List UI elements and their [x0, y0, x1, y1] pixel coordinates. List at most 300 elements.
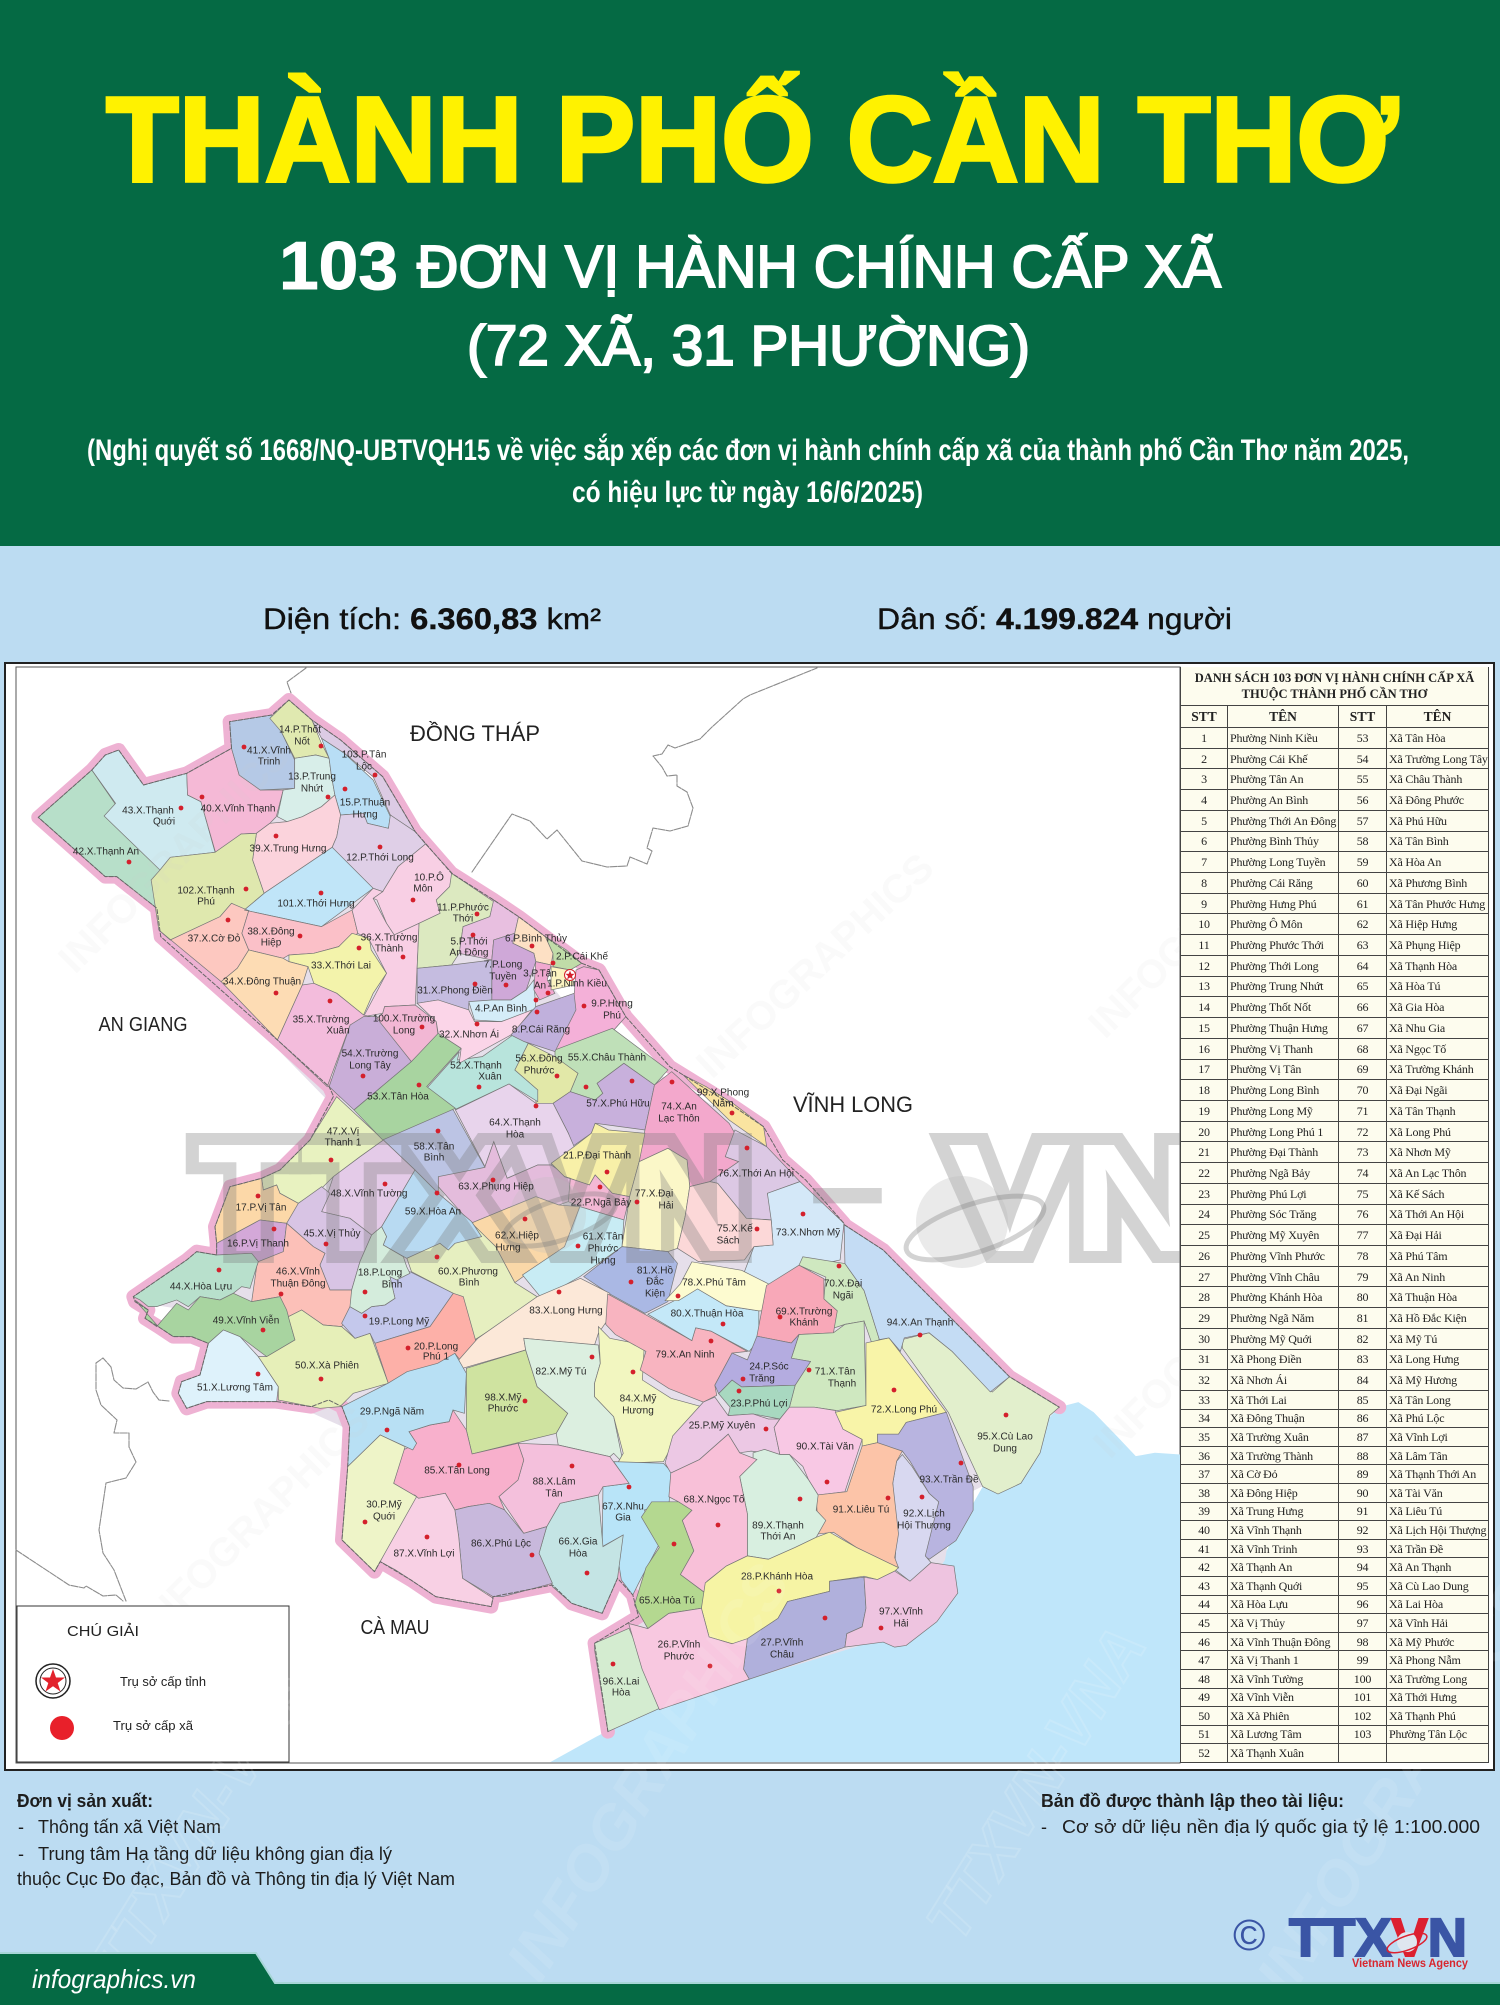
label 71 — [807, 1366, 856, 1390]
table: list of 103 communes: Phường Tân Lộc — [1389, 1727, 1467, 1741]
label 5: 5.P.Thới — [451, 936, 487, 948]
credits: production unit — [17, 1791, 455, 1889]
area 44 — [133, 1252, 258, 1307]
table: list of 103 communes: Xã Đại Hải — [1389, 1228, 1442, 1242]
label 74 — [658, 1080, 700, 1124]
table: list of 103 communes: 6 — [1201, 834, 1207, 848]
label 61 — [576, 1232, 623, 1266]
table: list of 103 communes: Xã Vĩnh Viễn — [1230, 1690, 1294, 1704]
area 103 — [312, 720, 415, 832]
label 43 — [122, 806, 183, 828]
table: list of 103 communes: Xã Mỹ Hương — [1389, 1373, 1457, 1387]
area 37 — [159, 903, 249, 982]
label 88: Tân — [545, 1488, 563, 1500]
diagonal infographics watermarks on map — [50, 733, 1333, 1646]
area 81 — [584, 1247, 677, 1313]
area 7 — [492, 933, 536, 1000]
label 16: 16.P.Vị Thanh — [227, 1238, 289, 1250]
table: list of 103 communes: 59 — [1357, 855, 1368, 869]
label 103 — [342, 750, 386, 777]
area 28 — [701, 1532, 899, 1644]
label 5 — [450, 933, 488, 958]
communes: north group — [38, 700, 582, 1140]
label 23: 23.P.Phú Lợi — [731, 1398, 787, 1410]
table: list of 103 communes: Xã Thới An Hội — [1389, 1207, 1464, 1221]
communes: west group — [133, 1097, 485, 1408]
table: list of 103 communes: 16 — [1198, 1042, 1210, 1056]
table: list of 103 communes: Xã Phong Nẫm — [1389, 1653, 1461, 1667]
label 24: 24.P.Sóc — [749, 1362, 789, 1372]
area 70 — [799, 1257, 879, 1343]
area 101 — [244, 847, 373, 927]
table: list of 103 communes: 69 — [1357, 1062, 1368, 1076]
table: list of 103 communes: 10 — [1198, 917, 1210, 931]
table: list of 103 communes: Phường An Bình — [1230, 793, 1308, 807]
label 74: Lạc Thôn — [658, 1114, 700, 1124]
table: list of 103 communes: 43 — [1198, 1579, 1210, 1593]
resolution note — [87, 433, 1409, 509]
area 36 — [352, 888, 419, 1017]
label 100: 100.X.Trường — [373, 1014, 435, 1024]
label 96 — [603, 1662, 639, 1698]
label 10 — [411, 870, 444, 902]
table: list of 103 communes: Xã Vĩnh Trinh — [1230, 1542, 1297, 1556]
credits: production unit: thuộc Cục Đo đạc, Bản đồ và Thông tin địa lý Việt Nam — [17, 1869, 455, 1889]
label 54: 54.X.Trường — [342, 1048, 398, 1060]
map area — [0, 667, 1500, 1763]
table: list of 103 communes: STT — [1191, 708, 1217, 724]
label 72: 72.X.Long Phú — [871, 1404, 937, 1416]
table: list of 103 communes: 3 — [1201, 772, 1207, 786]
table: list of 103 communes: THUỘC THÀNH PHỐ CẦN THƠ — [1242, 687, 1427, 701]
area 1 — [551, 967, 574, 990]
label 6 — [505, 932, 567, 948]
table: list of 103 communes: 12 — [1198, 959, 1210, 973]
area 85 — [394, 1410, 524, 1510]
table: list of 103 communes: Phường Ngã Năm — [1230, 1311, 1314, 1325]
label 51: 51.X.Lương Tâm — [197, 1382, 273, 1394]
map legend: CHÚ GIẢI — [67, 1623, 139, 1640]
area 2 — [545, 937, 582, 970]
table: list of 103 communes: Xã Trần Đề — [1389, 1542, 1443, 1556]
table: list of 103 communes: 98 — [1357, 1635, 1368, 1649]
area 55 — [555, 1028, 668, 1100]
table: list of 103 communes: 83 — [1357, 1352, 1368, 1366]
label 22: 22.P.Ngã Bảy — [571, 1198, 631, 1208]
table: list of 103 communes: 29 — [1198, 1311, 1210, 1325]
label 38: 38.X.Đông — [247, 926, 295, 938]
area 86 — [455, 1503, 552, 1597]
label 47: Thanh 1 — [325, 1138, 362, 1148]
area 91 — [816, 1443, 902, 1568]
watermark: TTXVN VNA: – — [809, 1098, 886, 1270]
table: list of 103 communes: 47 — [1198, 1653, 1210, 1667]
area 80 — [648, 1289, 759, 1351]
area 45 — [287, 1187, 372, 1290]
table: list of 103 communes: 52 — [1198, 1746, 1210, 1760]
table: list of 103 communes: 91 — [1357, 1504, 1368, 1518]
label 70: 70.X.Đại — [824, 1278, 862, 1290]
label 25: 25.P.Mỹ Xuyên — [689, 1420, 755, 1432]
border dashes — [38, 700, 1059, 1732]
label 46: 46.X.Vĩnh — [276, 1266, 320, 1278]
table: list of 103 communes: Xã Thuận Hòa — [1389, 1290, 1457, 1304]
table: list of 103 communes: Xã Mỹ Phước — [1389, 1635, 1454, 1649]
label 86: 86.X.Phú Lộc — [471, 1538, 531, 1550]
label 84: 84.X.Mỹ — [620, 1394, 656, 1404]
table: list of 103 communes: 99 — [1357, 1653, 1368, 1667]
table: list of 103 communes: Phường Mỹ Xuyên — [1230, 1228, 1319, 1242]
table: list of 103 communes: Xã Cờ Đỏ — [1230, 1467, 1277, 1481]
table: list of 103 communes: 39 — [1198, 1504, 1210, 1518]
table: list of 103 communes: 19 — [1198, 1104, 1210, 1118]
area 46 — [252, 1223, 352, 1327]
table: list of 103 communes: 67 — [1357, 1021, 1368, 1035]
label 67: 67.X.Nhu — [602, 1502, 644, 1512]
label 14: 14.P.Thốt — [279, 724, 321, 736]
table: list of 103 communes: Xã Vị Thủy — [1230, 1616, 1285, 1630]
area 100 — [377, 1005, 438, 1062]
table: list of 103 communes: 90 — [1357, 1486, 1368, 1500]
table: list of 103 communes: 28 — [1198, 1290, 1210, 1304]
table: list of 103 communes: 75 — [1357, 1187, 1368, 1201]
label 3: An — [534, 980, 546, 992]
table: list of 103 communes: 14 — [1198, 1000, 1210, 1014]
area 10 — [373, 844, 452, 935]
label 9 — [582, 998, 633, 1022]
area 93 — [877, 1412, 973, 1559]
table: list of 103 communes: 70 — [1357, 1083, 1368, 1097]
table: list of 103 communes: 54 — [1357, 752, 1368, 766]
label 62 — [495, 1217, 539, 1254]
table: list of 103 communes: 42 — [1198, 1560, 1210, 1574]
table: list of 103 communes: TÊN — [1269, 708, 1297, 724]
table: list of 103 communes: Phường Cái Răng — [1230, 876, 1313, 890]
table: list of 103 communes: Xã Trường Long Tây — [1389, 752, 1488, 766]
resolution note: có hiệu lực từ ngày 16/6/2025) — [572, 476, 923, 509]
label 33 — [311, 946, 371, 972]
diagonal infographics watermarks on map: INFOGRAPHICS — [130, 1398, 378, 1646]
table: list of 103 communes: Phường Phước Thới — [1230, 938, 1324, 952]
label 46: Thuận Đông — [270, 1278, 326, 1290]
table: list of 103 communes: 88 — [1357, 1449, 1368, 1463]
label 97: Hải — [893, 1618, 909, 1630]
label 41: Trinh — [258, 756, 280, 768]
table: list of 103 communes: 40 — [1198, 1523, 1210, 1537]
area 99 — [683, 1075, 767, 1147]
area 24 — [715, 1334, 810, 1394]
label 42 — [73, 846, 139, 864]
legend: provincial seat: Trụ sở cấp tỉnh — [120, 1674, 206, 1689]
table: list of 103 communes: Xã Hòa Lựu — [1230, 1597, 1288, 1611]
label 21 — [563, 1150, 631, 1174]
label 45 — [303, 1228, 361, 1246]
area 64 — [455, 1084, 574, 1178]
label 89 — [752, 1497, 804, 1542]
label 11: Thới — [453, 914, 473, 924]
area 56 — [515, 1043, 578, 1113]
area 43 — [92, 750, 215, 870]
label 72 — [871, 1388, 937, 1416]
label 89: Thới An — [761, 1532, 795, 1542]
table: list of 103 communes: 4 — [1201, 793, 1207, 807]
table: list of 103 communes: Xã Long Hưng — [1389, 1352, 1459, 1366]
table: list of 103 communes: 56 — [1357, 793, 1368, 807]
label 78 — [676, 1278, 746, 1298]
table: list of 103 communes: 100 — [1354, 1672, 1371, 1686]
label 36: 36.X.Trường — [361, 932, 417, 944]
title: THÀNH PHỐ CẦN THƠ — [106, 71, 1399, 207]
table: list of 103 communes: 92 — [1357, 1523, 1368, 1537]
area 9 — [555, 967, 626, 1050]
area 75 — [677, 1182, 773, 1262]
area 72 — [835, 1338, 946, 1446]
label 49 — [213, 1314, 279, 1332]
table: list of 103 communes: Xã Trường Khánh — [1389, 1062, 1474, 1076]
label 74: 74.X.An — [661, 1102, 697, 1112]
watermark globes — [499, 1176, 1051, 1273]
table: list of 103 communes: 31 — [1198, 1352, 1210, 1366]
label 102: 102.X.Thạnh — [177, 886, 235, 896]
table: list of 103 communes: Xã Tài Văn — [1389, 1486, 1443, 1500]
label 101: 101.X.Thới Hưng — [277, 898, 355, 910]
label 68: 68.X.Ngọc Tố — [684, 1494, 745, 1506]
label 36: Thành — [375, 944, 403, 954]
label 61: Phước — [588, 1244, 618, 1254]
label 48: 48.X.Vĩnh Tường — [330, 1188, 408, 1200]
label 9: Phú — [603, 1010, 621, 1022]
label 3: 3.P.Tân — [523, 968, 557, 980]
label 50: 50.X.Xà Phiên — [295, 1360, 359, 1372]
table: list of 103 communes: Xã Hòa Tú — [1389, 979, 1440, 993]
label 39 — [250, 834, 326, 854]
table: list of 103 communes: 7 — [1201, 855, 1207, 869]
area 78 — [665, 1262, 768, 1311]
table: list of 103 communes: Phường Thuận Hưng — [1230, 1021, 1328, 1035]
label 35: 35.X.Trường — [293, 1014, 349, 1026]
area 38 — [242, 910, 358, 958]
table: list of 103 communes: 2 — [1201, 752, 1207, 766]
label 62: 62.X.Hiệp — [495, 1230, 539, 1242]
table: list of 103 communes: 27 — [1198, 1270, 1210, 1284]
area 74 — [639, 1072, 739, 1187]
label 41: 41.X.Vĩnh — [247, 746, 291, 756]
table: list of 103 communes: 77 — [1357, 1228, 1368, 1242]
label 18 — [358, 1268, 402, 1294]
label 95: 95.X.Cù Lao — [977, 1432, 1033, 1442]
area 14 — [270, 700, 329, 758]
label 29: 29.P.Ngã Năm — [360, 1406, 424, 1418]
label 90: 90.X.Tài Văn — [796, 1442, 854, 1452]
website: infographics.vn — [32, 1964, 196, 1994]
table: list of 103 communes: Phường Mỹ Quới — [1230, 1332, 1312, 1346]
table: list of 103 communes: 79 — [1357, 1270, 1368, 1284]
area 71 — [789, 1321, 866, 1411]
diagonal infographics watermarks on map: INFOGRAPHICS — [1085, 1218, 1333, 1466]
table: list of 103 communes: 11 — [1198, 938, 1210, 952]
table: list of 103 communes: 38 — [1198, 1486, 1210, 1500]
label 93 — [919, 1461, 979, 1486]
label 57: 57.X.Phú Hữu — [586, 1098, 650, 1110]
area 95 — [902, 1333, 1059, 1494]
area 77 — [622, 1148, 690, 1252]
label 83: 83.X.Long Hưng — [529, 1306, 603, 1316]
label 83 — [529, 1290, 603, 1316]
area 15 — [321, 738, 390, 828]
table: list of 103 communes: Phường Thới Long — [1230, 959, 1318, 973]
credits: production unit: Đơn vị sản xuất: — [17, 1791, 153, 1811]
label 103: Lộc — [356, 762, 372, 772]
table: list of 103 communes: Xã Phú Tâm — [1389, 1249, 1447, 1263]
label 33: 33.X.Thới Lai — [311, 960, 371, 972]
table: list of 103 communes: 82 — [1357, 1332, 1368, 1346]
label 77: Hải — [658, 1200, 674, 1212]
table: list of 103 communes: Xã Hòa An — [1389, 855, 1441, 869]
province labels — [98, 721, 913, 1639]
label 76 — [718, 1146, 794, 1180]
table: list of 103 communes: 22 — [1198, 1166, 1210, 1180]
table: list of 103 communes: Xã Đại Ngãi — [1389, 1083, 1447, 1097]
label 98 — [485, 1392, 527, 1414]
table: list of 103 communes: 37 — [1198, 1467, 1210, 1481]
table: list of 103 communes: Xã Tân Hòa — [1389, 731, 1445, 745]
label 42: 42.X.Thạnh An — [73, 846, 139, 858]
label 59 — [405, 1191, 461, 1218]
table: list of 103 communes: Xã Trường Long — [1389, 1672, 1467, 1686]
label 28 — [741, 1572, 813, 1593]
area 48 — [322, 1140, 415, 1235]
table: list of 103 communes: Phường Sóc Trăng — [1230, 1207, 1316, 1221]
label 70 — [824, 1264, 862, 1302]
table: list of 103 communes: 101 — [1354, 1690, 1371, 1704]
label 52 — [450, 1060, 502, 1089]
label 12: 12.P.Thới Long — [346, 852, 414, 864]
table: list of 103 communes: Xã Vĩnh Hải — [1389, 1616, 1448, 1630]
label 76: 76.X.Thới An Hội — [718, 1168, 794, 1180]
map legend — [17, 1606, 289, 1762]
label 46 — [270, 1266, 326, 1296]
diagonal infographics watermarks on map: INFOGRAPHICS — [1080, 798, 1328, 1046]
label 23 — [731, 1389, 787, 1410]
label 40: 40.X.Vĩnh Thạnh — [201, 804, 275, 814]
label 27: Châu — [770, 1650, 794, 1660]
table: list of 103 communes: 86 — [1357, 1411, 1368, 1425]
label 13: 13.P.Trung — [288, 772, 336, 782]
area 84 — [595, 1327, 702, 1463]
table: list of 103 communes: Xã Đông Thuận — [1230, 1411, 1304, 1425]
table: list of 103 communes: Xã Mỹ Tú — [1389, 1332, 1437, 1346]
table: list of 103 communes: 80 — [1357, 1290, 1368, 1304]
area 32 — [417, 1000, 532, 1063]
label 17: 17.P.Vị Tân — [236, 1202, 286, 1214]
table: list of 103 communes: Phường Hưng Phú — [1230, 897, 1316, 911]
area 88 — [499, 1443, 629, 1533]
label 24 — [741, 1362, 789, 1384]
table: list of 103 communes: Xã Lai Hòa — [1389, 1597, 1443, 1611]
label 66: Hòa — [569, 1548, 588, 1560]
table: list of 103 communes: Xã Trường Xuân — [1230, 1430, 1309, 1444]
table: list of 103 communes: Xã Trung Hưng — [1230, 1504, 1303, 1518]
footer watermarks — [78, 1553, 1500, 2005]
label 56: 56.X.Đông — [515, 1054, 563, 1064]
label 17 — [236, 1194, 286, 1214]
label 53: 53.X.Tân Hòa — [367, 1092, 429, 1102]
area 23 — [719, 1380, 795, 1419]
table: list of 103 communes: Phường Thốt Nốt — [1230, 1000, 1311, 1014]
map frame — [5, 663, 1494, 1770]
label 34: 34.X.Đông Thuận — [223, 976, 301, 988]
table: list of 103 communes: 20 — [1198, 1125, 1210, 1139]
table: list of 103 communes: Phường Trung Nhứt — [1230, 979, 1323, 993]
credits: map source: Bản đồ được thành lập theo tài liệu: — [1041, 1791, 1344, 1811]
area 16 — [217, 1220, 287, 1262]
table: list of 103 communes: Xã Vĩnh Thuận Đông — [1230, 1635, 1330, 1649]
table: list of 103 communes: Xã Thạnh Quới — [1230, 1579, 1302, 1593]
label 57 — [586, 1079, 650, 1110]
label 102 — [177, 886, 248, 908]
label 8: 8.P.Cái Răng — [512, 1024, 570, 1036]
table: list of 103 communes: 84 — [1357, 1373, 1368, 1387]
table: list of 103 communes: 87 — [1357, 1430, 1368, 1444]
label 47 — [325, 1126, 362, 1162]
label 8 — [512, 1010, 570, 1036]
label 11 — [437, 902, 489, 924]
label 7: 7.P.Long — [484, 960, 522, 970]
label 60 — [435, 1255, 498, 1288]
area 6 — [513, 917, 553, 965]
table: list of 103 communes: DANH SÁCH 103 ĐƠN VỊ HÀNH CHÍNH CẤP XÃ — [1195, 671, 1474, 685]
label 53 — [367, 1083, 429, 1102]
label 75: 75.X.Kế — [717, 1222, 753, 1234]
province labels: ĐỒNG THÁP — [410, 721, 540, 746]
credits: production unit: Thông tấn xã Việt Nam — [38, 1817, 221, 1837]
table: list of 103 communes: Xã Phong Điền — [1230, 1352, 1301, 1366]
area 62 — [471, 1197, 580, 1283]
table: list of 103 communes: Xã Phương Bình — [1389, 876, 1467, 890]
label 78: 78.X.Phú Tâm — [682, 1278, 746, 1288]
label 85: 85.X.Tân Long — [424, 1466, 490, 1476]
label 99: Nắm — [712, 1096, 734, 1110]
table: list of 103 communes: 66 — [1357, 1000, 1368, 1014]
label 61: Hưng — [590, 1256, 616, 1266]
legend: commune seat — [50, 1716, 194, 1740]
provincial border — [38, 700, 1059, 1732]
table: list of 103 communes: 5 — [1201, 814, 1207, 828]
label 73: 73.X.Nhơn Mỹ — [776, 1228, 840, 1238]
area 5 — [459, 900, 519, 960]
table: list of 103 communes: Xã Đông Phước — [1389, 793, 1464, 807]
table: list of 103 communes: 102 — [1354, 1709, 1371, 1723]
area 97 — [845, 1563, 958, 1647]
table: list of 103 communes: 23 — [1198, 1187, 1210, 1201]
table: list of 103 communes: Phường Vĩnh Châu — [1230, 1270, 1319, 1284]
table: list of 103 communes: Xã Tân Bình — [1389, 834, 1449, 848]
credits: production unit: - — [18, 1817, 24, 1837]
label 93: 93.X.Trần Đề — [919, 1474, 979, 1486]
label 29 — [360, 1406, 424, 1432]
label 14: Nốt — [294, 736, 310, 748]
credits: map source — [1041, 1791, 1480, 1837]
label 7 — [484, 960, 522, 987]
label 87: 87.X.Vĩnh Lợi — [393, 1548, 455, 1560]
table: list of 103 communes: 8 — [1201, 876, 1207, 890]
stat: population: Dân số: 4.199.824 người — [877, 603, 1232, 636]
label 102: Phú — [197, 896, 215, 908]
label 84 — [620, 1370, 656, 1416]
table: list of 103 communes: 62 — [1357, 917, 1368, 931]
label 7: Tuyền — [489, 970, 517, 982]
label 32: 32.X.Nhơn Ái — [439, 1028, 499, 1040]
